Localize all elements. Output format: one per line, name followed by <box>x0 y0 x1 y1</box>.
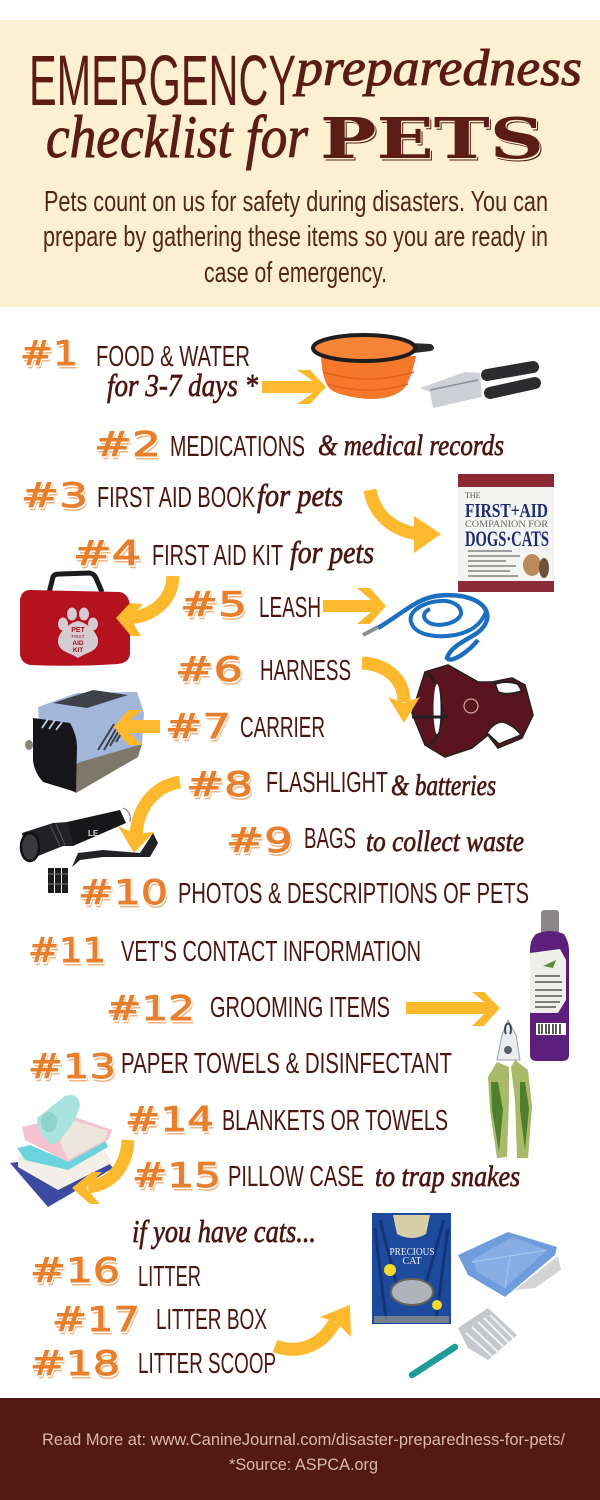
item 13: paper towels <box>28 1047 452 1087</box>
item 9: bags <box>226 821 524 861</box>
icon: harness <box>412 665 533 757</box>
arrow: to litter supplies <box>275 1305 351 1349</box>
icon: stack of towels <box>10 1095 113 1207</box>
item 8: flashlight: FLASHLIGHT <box>266 767 388 799</box>
intro paragraph <box>43 186 548 289</box>
item 14: blankets <box>125 1100 448 1140</box>
item 12: grooming items: #12 <box>106 989 195 1029</box>
icon: litter bag: PRECIOUS <box>390 1246 434 1258</box>
item 2: medications: MEDICATIONS <box>170 431 305 463</box>
item 18: litter scoop: LITTER SCOOP <box>138 1348 276 1380</box>
icon: litter box <box>458 1232 561 1297</box>
icon: litter bag <box>372 1213 451 1324</box>
arrow: to leash <box>323 588 386 624</box>
icon: red first aid kit: KIT <box>73 647 83 654</box>
item 4: first aid kit: for pets <box>290 534 374 570</box>
item 2: medications: & medical records <box>318 429 504 462</box>
title line 2: checklist for: checklist for <box>46 104 309 170</box>
icon: red first aid kit: AID <box>72 640 84 647</box>
item 4: first aid kit: #4 <box>73 534 141 574</box>
item 16: litter <box>30 1251 201 1293</box>
title line 2: PETS: PETS <box>320 106 544 172</box>
item 8: flashlight: #8 <box>186 765 253 805</box>
item 5: leash: LEASH <box>259 592 321 624</box>
icon: first aid book: COMPANION FOR <box>465 519 548 529</box>
item 12: grooming items: GROOMING ITEMS <box>210 992 390 1024</box>
item 13: paper towels: PAPER TOWELS & DISINFECTANT <box>121 1048 452 1080</box>
item 13: paper towels: #13 <box>28 1047 116 1087</box>
item 18: litter scoop: #18 <box>30 1344 120 1384</box>
item 6: harness: HARNESS <box>260 655 351 687</box>
item 4: first aid kit: FIRST AID KIT <box>152 540 283 572</box>
item 3: first aid book: #3 <box>21 476 88 516</box>
item 2: medications <box>94 425 504 465</box>
item 2: medications: #2 <box>94 425 161 465</box>
item 7: carrier <box>165 707 325 747</box>
item 8: flashlight <box>186 765 496 805</box>
item 9: bags: BAGS <box>304 823 356 855</box>
item 3: first aid book <box>21 476 343 516</box>
title line 1: preparedness: preparedness <box>292 40 582 97</box>
icon: flashlight and batteries <box>21 808 158 893</box>
item 7: carrier: CARRIER <box>240 712 325 744</box>
item 6: harness: #6 <box>175 650 243 690</box>
item 17: litter box: #17 <box>52 1300 140 1340</box>
item 5: leash <box>180 585 321 625</box>
item 1: food and water <box>20 334 258 403</box>
arrow: to food bowl <box>262 370 326 404</box>
item 11: vet contact: VET'S CONTACT INFORMATION <box>121 936 421 968</box>
arrow: to book <box>370 490 441 553</box>
icon: litter scoop <box>412 1308 517 1375</box>
item 8: flashlight: & batteries <box>391 769 496 802</box>
icon: litter bag: CAT <box>403 1256 421 1267</box>
intro paragraph: case of emergency. <box>204 257 387 289</box>
item 15: pillow case: to trap snakes <box>375 1160 520 1193</box>
item 16: litter: #16 <box>30 1251 120 1291</box>
item 17: litter box <box>52 1300 267 1340</box>
item 6: harness <box>175 650 351 690</box>
item 7: carrier: #7 <box>165 707 231 747</box>
arrow: to harness <box>362 663 420 723</box>
item 12: grooming items <box>106 989 390 1029</box>
arrow: to towels <box>72 1140 128 1204</box>
item 15: pillow case: PILLOW CASE <box>228 1161 364 1193</box>
panel: header <box>0 20 600 307</box>
item 3: first aid book: for pets <box>257 477 343 513</box>
item 1: food and water: FOOD & WATER <box>96 341 250 373</box>
icon: first aid book: FIRST+AID <box>465 500 548 522</box>
item 10: photos <box>78 873 529 913</box>
item 1: food and water: for 3-7 days * <box>107 367 258 403</box>
footer: read more link: Read More at: www.CanineJournal.com/disaster-preparedness-for-pets/ <box>42 1430 565 1449</box>
panel: footer <box>0 1398 600 1500</box>
icon: blue leash <box>363 595 487 659</box>
footer: source: *Source: ASPCA.org <box>229 1455 378 1474</box>
icon: flashlight and batteries: LE <box>88 829 99 838</box>
icon: nail clippers <box>488 1020 532 1158</box>
item 11: vet contact <box>28 931 421 971</box>
icon: first aid book: DOGS·CATS <box>465 526 549 551</box>
arrow: to flashlight <box>118 782 180 853</box>
item 15: pillow case: #15 <box>132 1156 221 1196</box>
item 9: bags: #9 <box>226 821 293 861</box>
icon: red first aid kit: FIRST <box>72 634 85 639</box>
icon: red first aid kit: PET <box>71 627 86 634</box>
item 11: vet contact: #11 <box>28 931 106 971</box>
item 17: litter box: LITTER BOX <box>156 1304 267 1336</box>
item 14: blankets: BLANKETS OR TOWELS <box>222 1105 448 1137</box>
cats subheading: if you have cats... <box>132 1213 316 1249</box>
item 9: bags: to collect waste <box>366 825 524 858</box>
item 1: food and water: #1 <box>20 334 78 374</box>
item 4: first aid kit <box>73 534 374 574</box>
title line 1: EMERGENCY: EMERGENCY <box>29 42 296 121</box>
icon: shampoo bottle <box>530 910 569 1061</box>
item 10: photos: #10 <box>78 873 168 913</box>
icon: collapsible orange bowl <box>313 335 434 399</box>
icon: pet carrier <box>25 690 144 793</box>
item 15: pillow case <box>132 1156 520 1196</box>
icon: red first aid kit <box>20 573 130 666</box>
item 18: litter scoop <box>30 1344 276 1384</box>
item 14: blankets: #14 <box>125 1100 214 1140</box>
item 3: first aid book: FIRST AID BOOK <box>97 482 255 514</box>
icon: can opener <box>420 367 535 408</box>
item 16: litter: LITTER <box>138 1261 201 1293</box>
arrow: to first aid kit <box>116 576 173 636</box>
icon: first aid book: THE <box>465 491 481 500</box>
icon: first aid book <box>458 474 554 592</box>
arrow: to grooming items <box>406 992 500 1026</box>
arrow: to carrier <box>114 710 160 745</box>
item 5: leash: #5 <box>180 585 247 625</box>
